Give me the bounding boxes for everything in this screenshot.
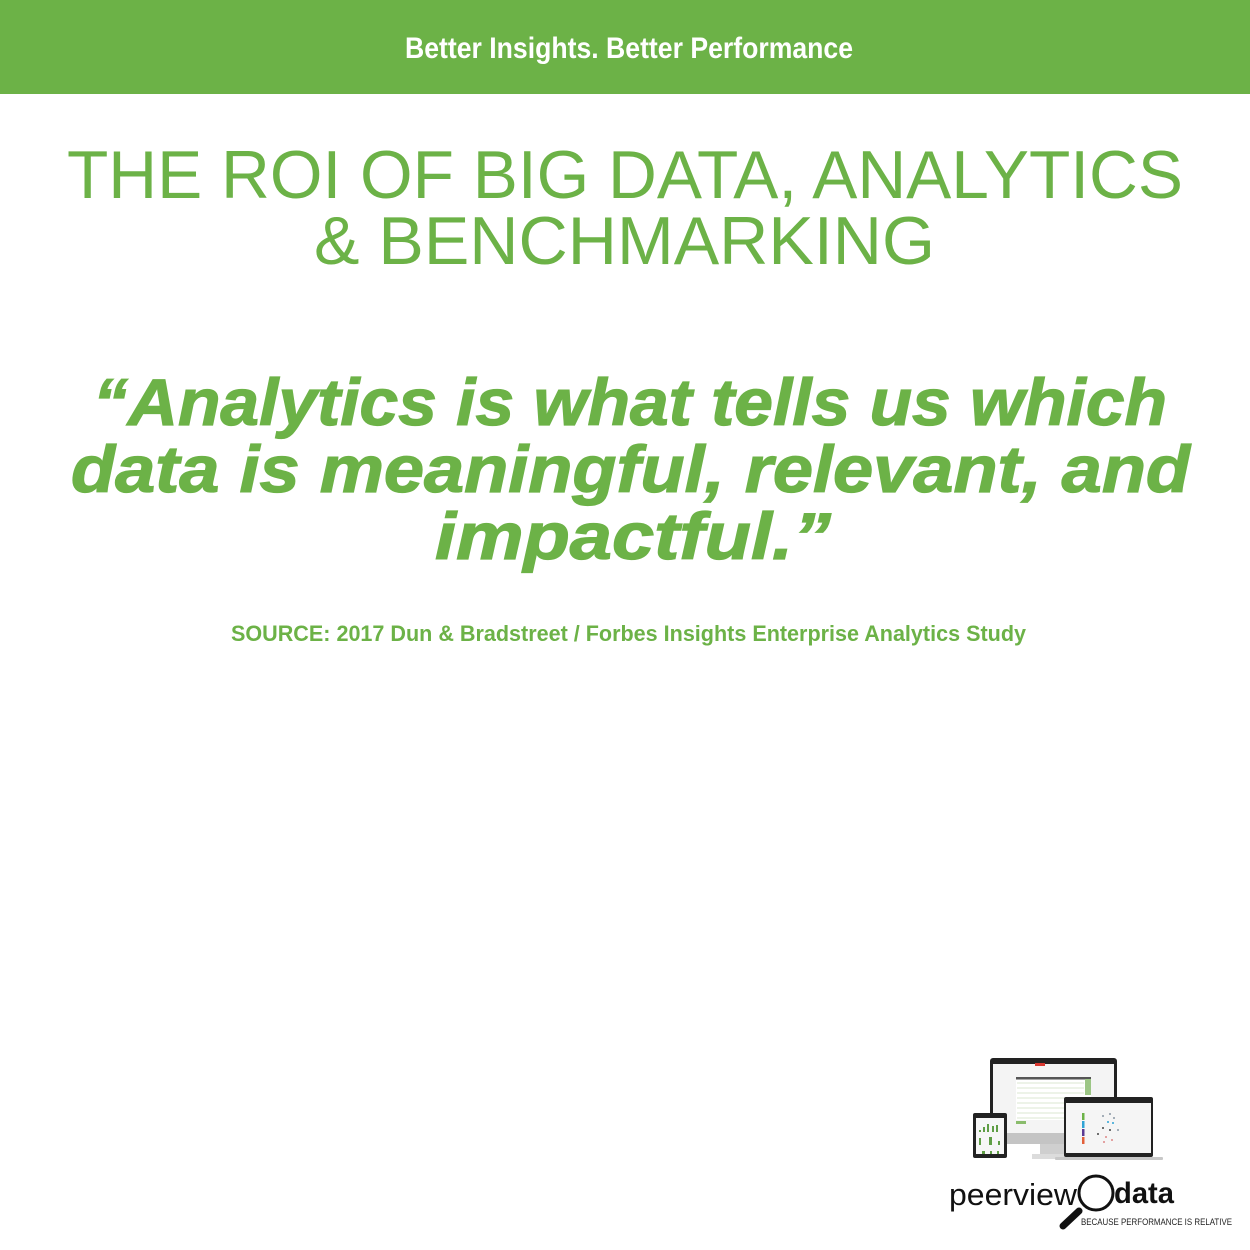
title: & BENCHMARKING bbox=[314, 203, 935, 279]
banner tagline: Better Insights. Better Performance bbox=[405, 32, 853, 65]
tablet bbox=[973, 1113, 1007, 1158]
title bbox=[67, 137, 1183, 279]
source line: SOURCE: 2017 Dun & Bradstreet / Forbes Insights Enterprise Analytics Study bbox=[231, 621, 1027, 646]
title: THE ROI OF BIG DATA, ANALYTICS bbox=[67, 137, 1183, 213]
logo: peerview data bbox=[949, 1176, 1232, 1228]
quote bbox=[71, 365, 1192, 573]
quote: data is meaningful, relevant, and bbox=[71, 432, 1192, 506]
device mockups bbox=[973, 1058, 1163, 1160]
quote: “Analytics is what tells us which bbox=[93, 365, 1167, 439]
header banner bbox=[0, 0, 1250, 94]
logo wordmark: data: data bbox=[1114, 1177, 1174, 1210]
quote: impactful.” bbox=[435, 499, 831, 573]
logo wordmark: peerview: peerview bbox=[949, 1177, 1078, 1212]
icon: magnifying glass bbox=[1063, 1176, 1113, 1226]
desktop monitor bbox=[990, 1058, 1117, 1159]
laptop bbox=[1055, 1097, 1163, 1160]
